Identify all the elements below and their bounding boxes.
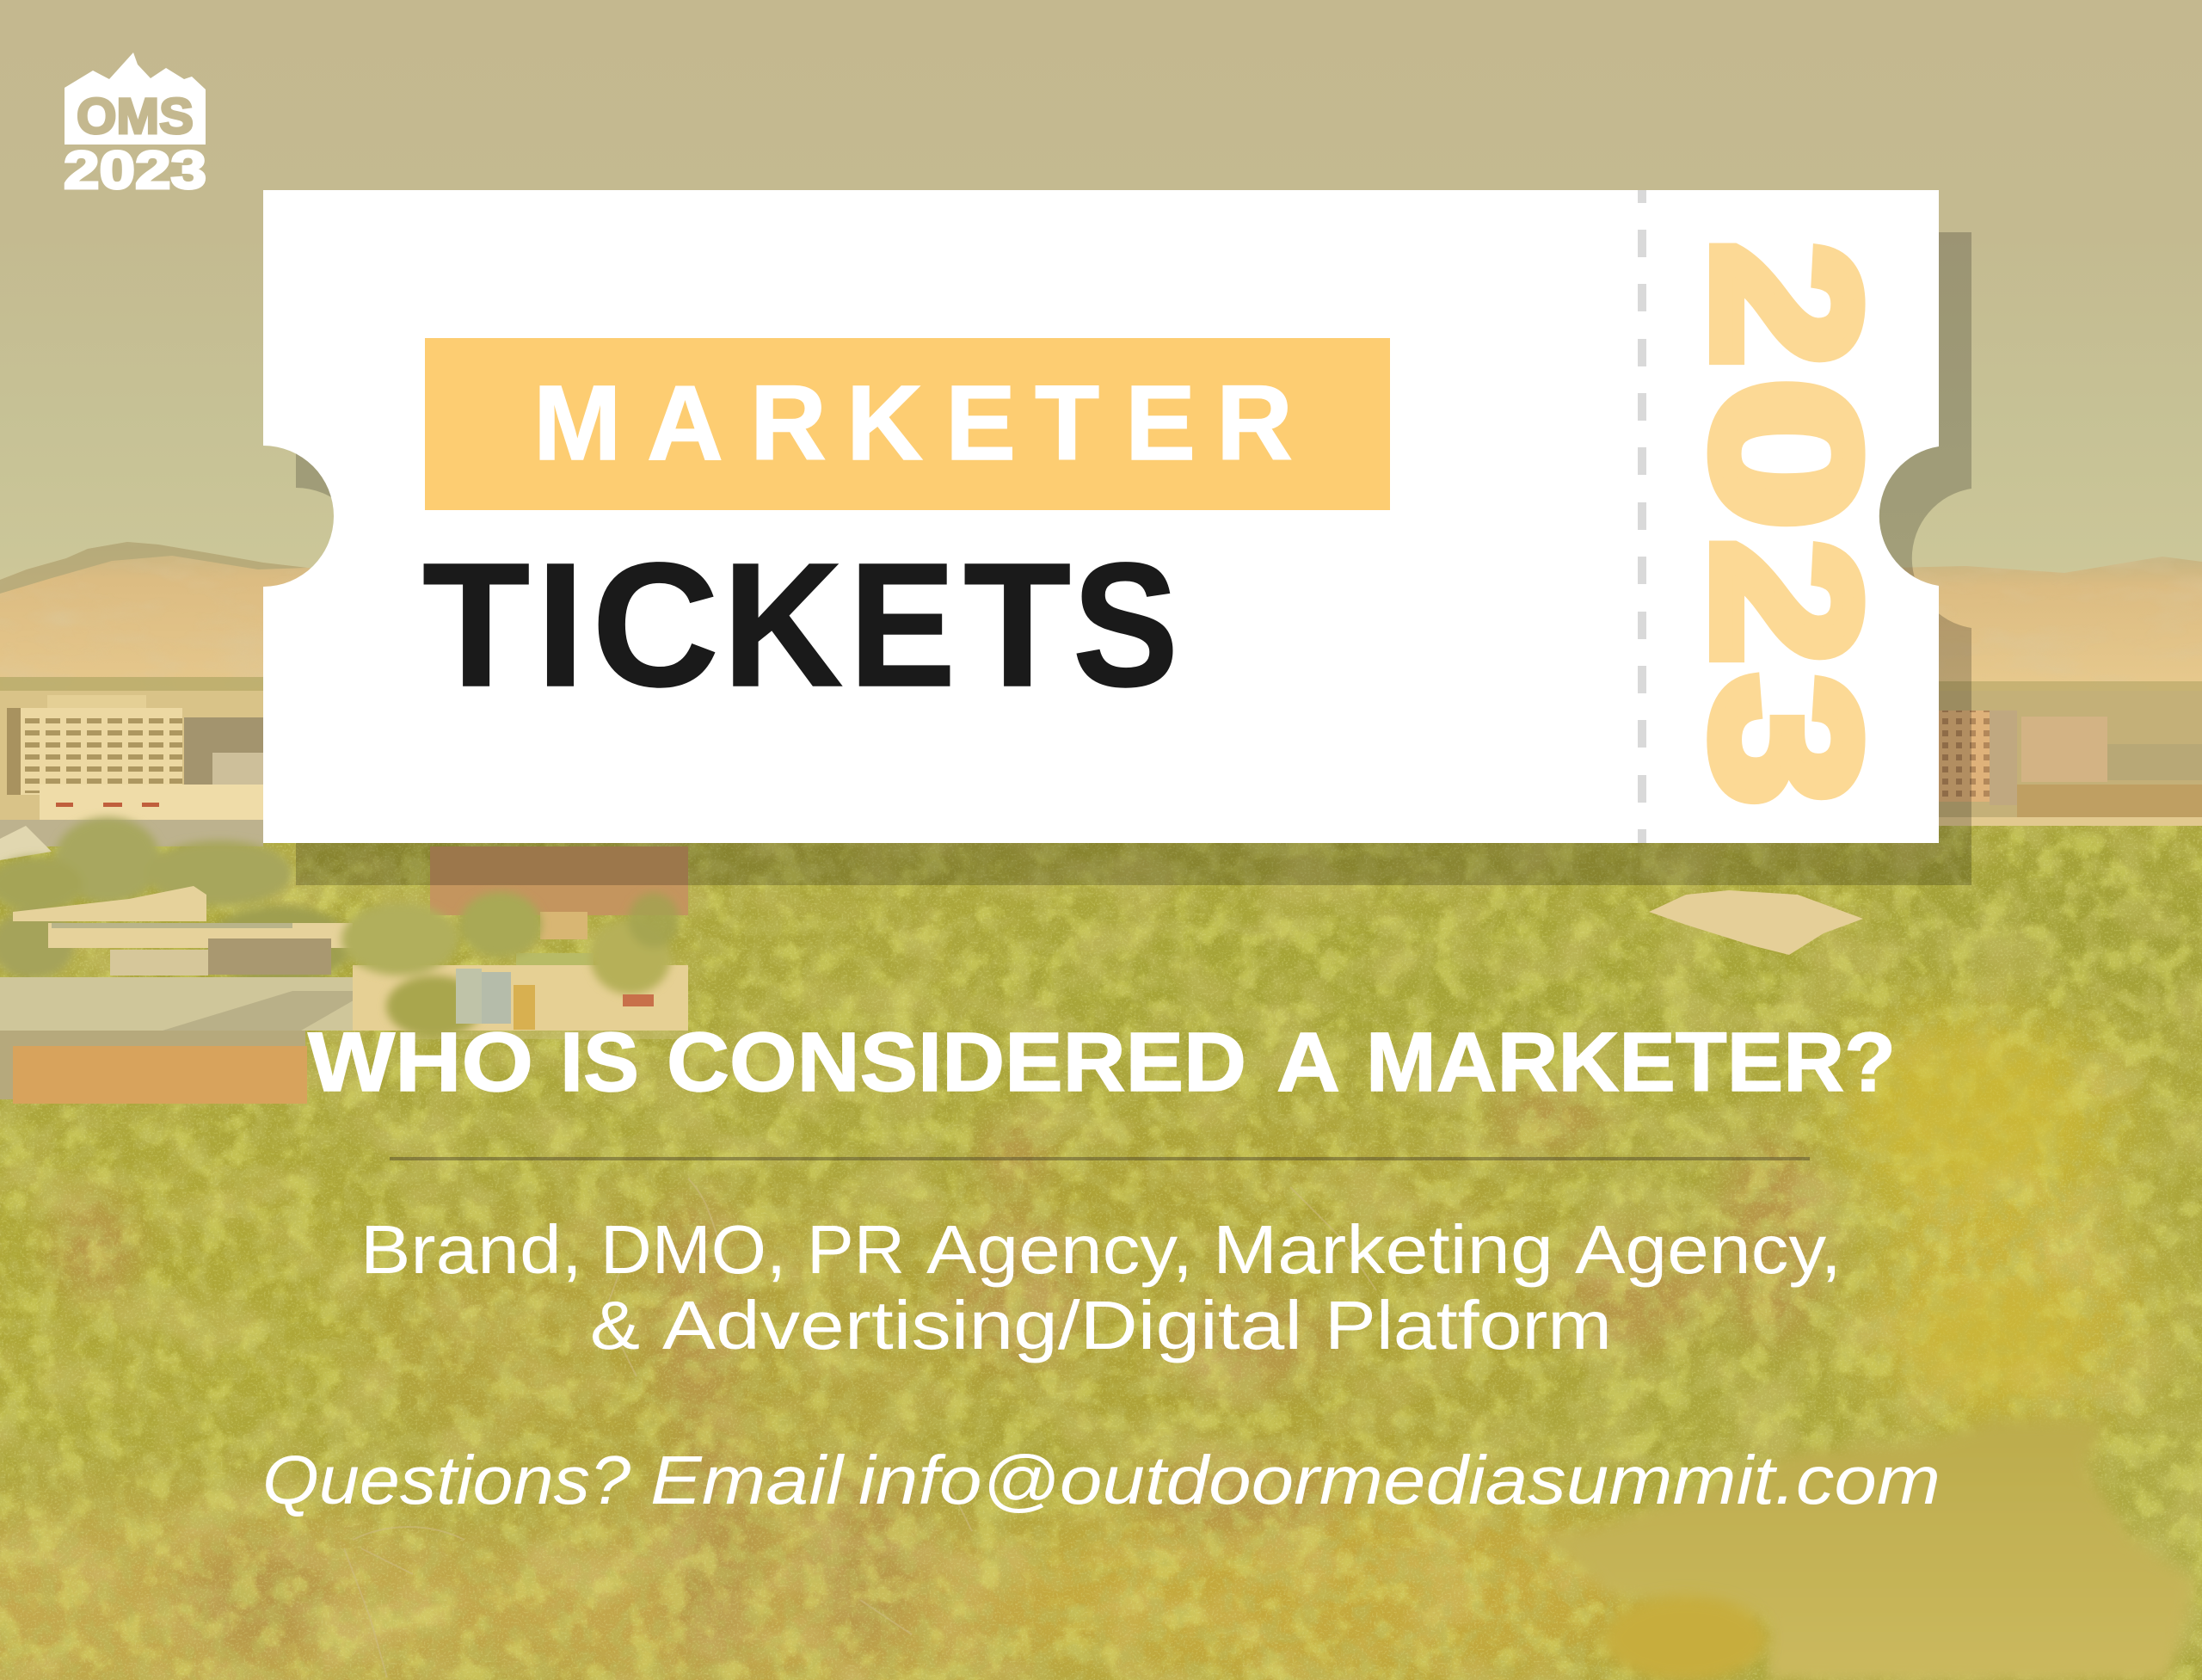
vertical year 2023: 3 — [1671, 674, 1902, 806]
heading: who is considered a marketer: IS — [560, 1015, 639, 1109]
text block: marketer types: PR — [807, 1211, 905, 1288]
vertical year 2023: 2 — [1671, 242, 1902, 367]
text block: marketer types: Marketing — [1213, 1211, 1553, 1288]
marketer banner — [425, 338, 1390, 510]
river — [1543, 1419, 2196, 1680]
yellow tree crowns — [1867, 1032, 2082, 1402]
text block: marketer types: Advertising/Digital — [662, 1287, 1302, 1363]
tickets heading: T — [422, 526, 530, 723]
text block: marketer types: Brand, — [360, 1211, 582, 1288]
city lower left — [0, 817, 404, 1104]
heading: who is considered a marketer: WHO — [308, 1015, 533, 1109]
heading: who is considered a marketer: A — [1276, 1015, 1340, 1109]
foliage colour zones — [0, 834, 2202, 1680]
heading: who is considered a marketer — [308, 1015, 1896, 1109]
far-right cream building among trees — [1649, 890, 1863, 955]
text block: marketer types: Platform — [1325, 1287, 1612, 1363]
text block: marketer types — [360, 1211, 1842, 1363]
logo text 2023: 2023 — [64, 141, 206, 200]
sky — [0, 0, 2202, 654]
ticket — [263, 190, 1939, 843]
contact email line — [262, 1442, 1941, 1518]
marketer label: MARKETER — [533, 365, 1293, 483]
vertical year 2023: 2 — [1671, 539, 1902, 665]
tickets heading: C — [592, 526, 719, 723]
tickets heading: E — [849, 526, 956, 723]
text block: marketer types: DMO, — [600, 1211, 786, 1288]
logo text OMS: OMS — [77, 89, 194, 145]
tickets heading: I — [536, 526, 585, 723]
logo: OMS 2023 — [64, 52, 206, 200]
perforation dashed line — [1638, 190, 1646, 843]
city right of ticket — [1939, 691, 2202, 826]
tickets heading: S — [1073, 526, 1178, 723]
text block: marketer types: Agency, — [926, 1211, 1193, 1288]
contact email line: info@outdoormediasummit.com — [858, 1442, 1941, 1518]
contact email line: Email — [650, 1442, 845, 1518]
vertical year 2023: 0 — [1671, 378, 1902, 530]
text block: marketer types: Agency, — [1575, 1211, 1842, 1288]
vertical year 2023 — [1671, 242, 1902, 806]
bare branches — [344, 1178, 1376, 1677]
foliage shadows between trees — [52, 1088, 1824, 1669]
tickets heading: T — [963, 526, 1071, 723]
tickets heading: K — [723, 526, 843, 723]
icon: mountain badge — [65, 52, 206, 145]
heading: who is considered a marketer: CONSIDERED — [667, 1015, 1246, 1109]
ticket body — [263, 190, 1939, 843]
divider rule — [390, 1157, 1810, 1160]
heading: who is considered a marketer: MARKETER? — [1366, 1015, 1896, 1109]
hills — [0, 542, 2202, 691]
foliage texture — [0, 813, 2202, 1680]
tickets heading — [422, 526, 1178, 723]
city left of ticket — [0, 691, 263, 860]
forest base — [0, 813, 2202, 1680]
text block: marketer types: & — [590, 1287, 640, 1363]
contact email line: Questions? — [262, 1442, 631, 1518]
ticket shadow — [296, 232, 1971, 885]
road, brick building and street trees — [341, 846, 688, 1039]
